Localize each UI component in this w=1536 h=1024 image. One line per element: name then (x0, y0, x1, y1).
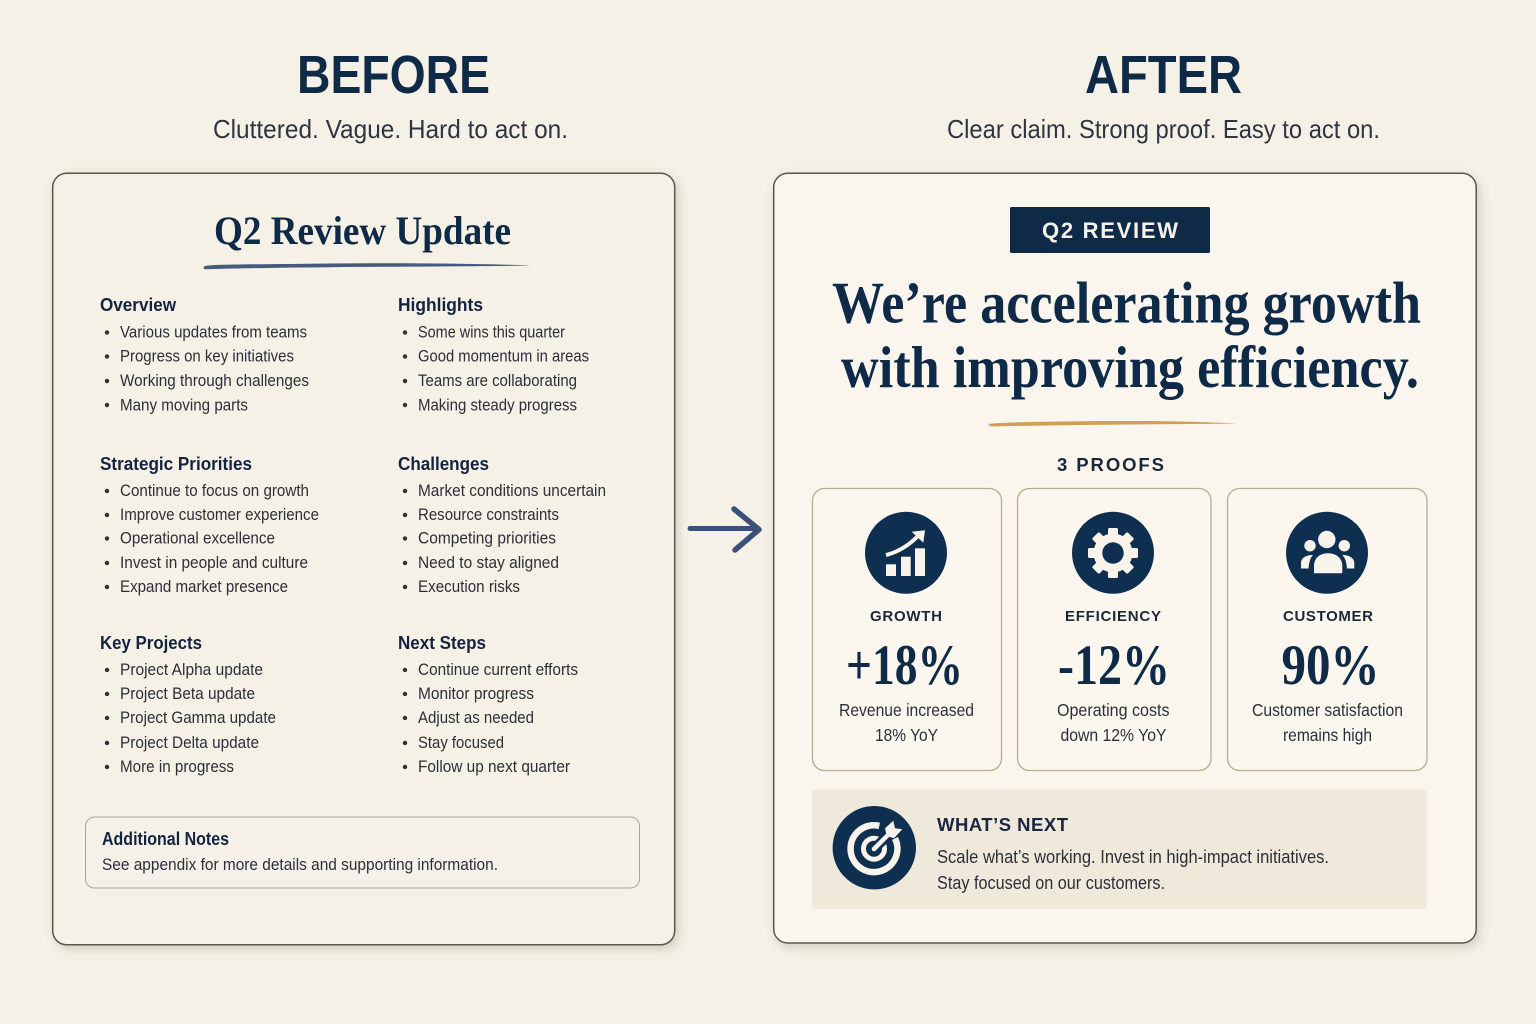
callout: what's next (812, 790, 1427, 909)
icon: gear (1072, 512, 1154, 594)
section: strategic priorities: Expand market presence (120, 578, 288, 596)
section: highlights (398, 294, 589, 414)
headline underline (989, 421, 1236, 426)
section: strategic priorities: Operational excellence (120, 530, 275, 548)
additional notes box (86, 817, 640, 888)
section: next steps (398, 632, 578, 776)
section: key projects: Key Projects (100, 632, 202, 653)
card: growth (812, 488, 1002, 770)
heading: before: BEFORE (297, 45, 490, 105)
additional notes box: Additional Notes (102, 829, 229, 849)
section: strategic priorities: Continue to focus on growth (120, 482, 309, 500)
section: overview: Overview (100, 294, 177, 315)
section: next steps: Monitor progress (418, 685, 534, 703)
card: efficiency: down 12% YoY (1060, 725, 1167, 745)
heading: after (947, 45, 1380, 144)
section: challenges: Need to stay aligned (418, 554, 559, 572)
arrow: before to after (690, 509, 759, 550)
section: highlights: Some wins this quarter (418, 324, 565, 342)
additional notes box: See appendix for more details and supporting information. (102, 856, 498, 874)
card: efficiency: -12% (1058, 634, 1170, 697)
title underline (204, 263, 531, 269)
section: overview: Working through challenges (120, 372, 309, 390)
icon: growth chart (865, 512, 947, 594)
section: strategic priorities: Improve customer experience (120, 506, 319, 524)
callout: what's next: Stay focused on our customers. (937, 873, 1165, 893)
callout: what's next: WHAT’S NEXT (937, 814, 1069, 835)
section: key projects: Project Alpha update (120, 661, 263, 679)
headline (832, 270, 1421, 400)
section: strategic priorities: Strategic Priorities (100, 453, 252, 474)
card: efficiency: Operating costs (1057, 700, 1170, 720)
heading: after: AFTER (1085, 45, 1242, 105)
panel: before slide (53, 173, 675, 945)
section: strategic priorities (100, 453, 319, 596)
section: key projects: More in progress (120, 758, 234, 776)
section: key projects: Project Beta update (120, 685, 255, 703)
section: next steps: Adjust as needed (418, 709, 534, 727)
section: highlights: Making steady progress (418, 396, 577, 414)
section: overview: Progress on key initiatives (120, 348, 294, 366)
panel: after slide (774, 173, 1476, 943)
section: challenges: Market conditions uncertain (418, 482, 606, 500)
subheading: 3 proofs: 3 PROOFS (1057, 454, 1164, 475)
card: efficiency (1018, 488, 1211, 770)
headline: We’re accelerating growth (832, 270, 1421, 336)
card: growth: Revenue increased (839, 700, 974, 720)
heading: after: Clear claim. Strong proof. Easy to act on. (947, 114, 1380, 144)
headline: with improving efficiency. (841, 334, 1419, 400)
section: next steps: Continue current efforts (418, 661, 578, 679)
section: challenges: Challenges (398, 453, 489, 474)
card: efficiency: EFFICIENCY (1065, 608, 1161, 625)
badge: Q2 review (1010, 207, 1210, 253)
section: key projects: Project Gamma update (120, 709, 276, 727)
card: growth: 18% YoY (875, 725, 938, 745)
section: overview (100, 294, 309, 414)
section: next steps: Next Steps (398, 632, 486, 653)
badge: Q2 review: Q2 REVIEW (1042, 218, 1178, 243)
section: challenges (398, 453, 606, 596)
section: challenges: Resource constraints (418, 506, 559, 524)
section: challenges: Competing priorities (418, 530, 556, 548)
heading: before: Cluttered. Vague. Hard to act on. (213, 114, 568, 144)
section: challenges: Execution risks (418, 578, 520, 596)
section: key projects: Project Delta update (120, 734, 259, 752)
card: customer: remains high (1283, 725, 1372, 745)
section: strategic priorities: Invest in people and culture (120, 554, 308, 572)
section: highlights: Teams are collaborating (418, 372, 577, 390)
callout: what's next: Scale what’s working. Invest in high-impact initiatives. (937, 847, 1329, 867)
card: growth: GROWTH (870, 608, 942, 625)
card: customer: Customer satisfaction (1252, 700, 1403, 720)
card: customer: 90% (1282, 634, 1380, 697)
section: next steps: Stay focused (418, 734, 504, 752)
card: customer: CUSTOMER (1283, 608, 1373, 625)
section: highlights: Good momentum in areas (418, 348, 589, 366)
icon: target with arrow (833, 806, 916, 889)
card: growth: +18% (846, 634, 963, 697)
section: overview: Many moving parts (120, 396, 248, 414)
section: overview: Various updates from teams (120, 324, 307, 342)
icon: people (1286, 512, 1368, 594)
card: customer (1228, 488, 1427, 770)
section: highlights: Highlights (398, 294, 483, 315)
slide title: Q2 Review Update: Q2 Review Update (214, 208, 511, 253)
section: next steps: Follow up next quarter (418, 758, 570, 776)
heading: before (213, 45, 568, 144)
section: key projects (100, 632, 276, 776)
